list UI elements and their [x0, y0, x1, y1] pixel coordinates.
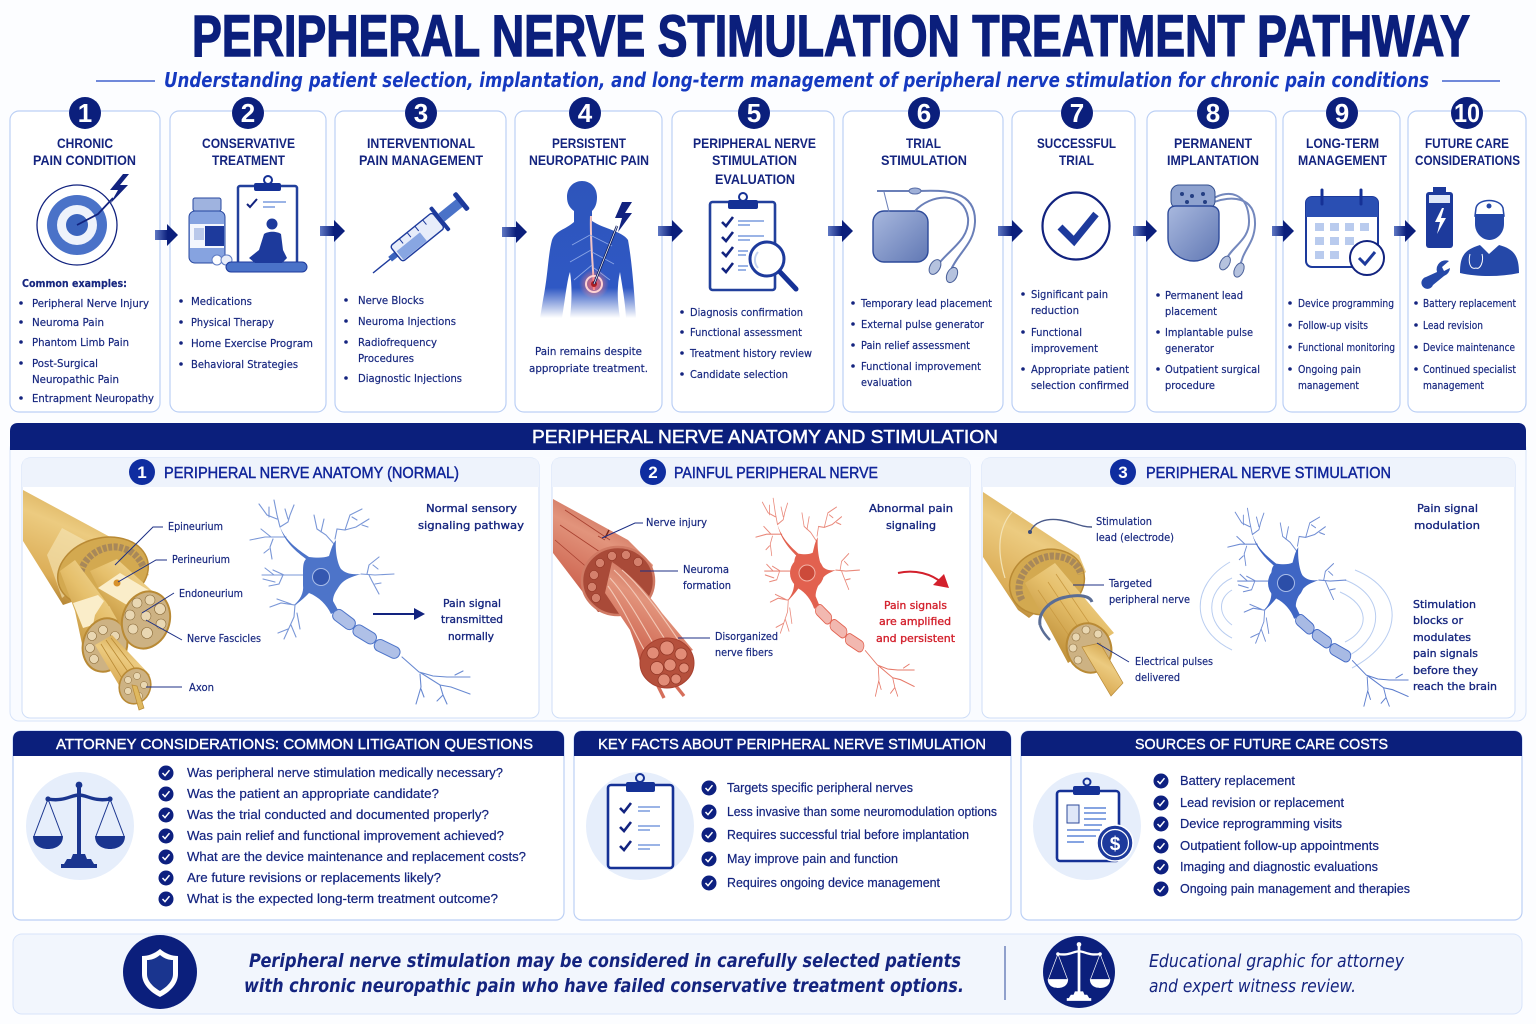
- heading: STIMULATION: [712, 152, 797, 168]
- captions: signaling: [886, 519, 936, 532]
- icon: clipboard and magnifier: [710, 193, 796, 290]
- list: Procedures: [358, 353, 414, 365]
- heading: STIMULATION: [881, 152, 967, 168]
- list: Temporary lead placement: [860, 298, 992, 310]
- panel: step 3 interventional pain management: [335, 97, 506, 412]
- list: Home Exercise Program: [191, 338, 313, 350]
- arrow 8 to 9: [1272, 220, 1294, 242]
- captions: [869, 502, 956, 645]
- list: Common examples:: [22, 278, 127, 290]
- icon: clipboard: [586, 772, 694, 880]
- list: Device maintenance: [1423, 342, 1515, 354]
- cost list: Imaging and diagnostic evaluations: [1180, 859, 1378, 874]
- heading: PERSISTENT: [552, 135, 626, 151]
- list: Medications: [191, 296, 252, 308]
- sub-panel 3: stimulation: [982, 458, 1515, 718]
- list: [179, 296, 313, 371]
- captions: signaling pathway: [418, 519, 525, 532]
- red signal arrow: [898, 572, 949, 588]
- list: Pain relief assessment: [861, 340, 970, 352]
- list: evaluation: [861, 377, 912, 389]
- heading: LONG-TERM: [1306, 135, 1379, 151]
- captions: modulates: [1413, 631, 1471, 644]
- list: Neuropathic Pain: [32, 374, 119, 386]
- nerve labels: Endoneurium: [179, 588, 243, 600]
- question list: What are the device maintenance and replacement costs?: [187, 849, 526, 864]
- list: Functional improvement: [861, 361, 981, 373]
- heading: INTERVENTIONAL: [367, 135, 475, 151]
- list: Candidate selection: [690, 369, 788, 381]
- list: procedure: [1165, 380, 1215, 392]
- heading: SUCCESSFUL: [1037, 135, 1116, 151]
- panel: step 4 persistent neuropathic pain: [515, 97, 662, 412]
- illustration: normal neuron: [250, 500, 470, 704]
- list: Functional: [1031, 327, 1082, 339]
- sub-panel heading: [640, 459, 878, 485]
- heading: PERMANENT: [1174, 135, 1252, 151]
- nerve labels: Axon: [189, 682, 214, 694]
- illustration: nerve cross-section: [23, 490, 177, 710]
- nerve labels: Nerve injury: [646, 517, 707, 529]
- list: Post-Surgical: [32, 358, 98, 370]
- list: Functional monitoring: [1298, 342, 1395, 354]
- panel heading: [1021, 731, 1522, 756]
- list: [851, 298, 992, 389]
- sub-panel 1: normal anatomy: [22, 458, 539, 718]
- arrow 4 to 5: [658, 220, 683, 242]
- nerve labels: Disorganized: [715, 631, 778, 643]
- panel heading: ATTORNEY CONSIDERATIONS: COMMON LITIGATION QUESTIONS: [56, 736, 533, 753]
- heading: TRIAL: [906, 135, 941, 151]
- sub-panel heading: [129, 459, 459, 485]
- nerve labels: Electrical pulses: [1135, 656, 1213, 668]
- nerve labels: Epineurium: [168, 521, 223, 533]
- list: [680, 307, 812, 381]
- nerve labels: Perineurium: [172, 554, 230, 566]
- captions: Pain signal: [1417, 502, 1478, 515]
- badge 1: [69, 97, 101, 129]
- nerve labels: Neuroma: [683, 564, 729, 576]
- heading: FUTURE CARE: [1425, 135, 1509, 151]
- signal arrow: [373, 608, 425, 620]
- list: Device programming: [1298, 298, 1394, 310]
- heading: PAIN CONDITION: [33, 152, 136, 168]
- badge 7: 7: [1070, 98, 1084, 128]
- list: Ongoing pain: [1298, 364, 1361, 376]
- nerve labels: [1073, 516, 1213, 684]
- badge 4: [569, 97, 601, 129]
- captions: blocks or: [1413, 614, 1463, 627]
- heading: [359, 135, 483, 168]
- list: Significant pain: [1031, 289, 1108, 301]
- nerve labels: [115, 521, 261, 694]
- facts list: Targets specific peripheral nerves: [727, 780, 913, 795]
- heading: [1298, 135, 1387, 168]
- list: Continued specialist: [1423, 364, 1516, 376]
- captions: modulation: [1414, 519, 1480, 532]
- list: [19, 278, 154, 405]
- arrow 1 to 2: [155, 224, 178, 246]
- arrow 3 to 4: [502, 221, 527, 243]
- heading: [202, 135, 295, 168]
- list: reduction: [1031, 305, 1079, 317]
- captions: reach the brain: [1413, 680, 1497, 693]
- heading: [33, 135, 136, 168]
- panel heading: [574, 731, 1011, 756]
- section heading bar: [10, 423, 1526, 450]
- badge 5: 5: [747, 98, 761, 128]
- heading: EVALUATION: [715, 171, 795, 187]
- captions: [418, 502, 525, 643]
- heading: IMPLANTATION: [1167, 152, 1259, 168]
- list: Functional assessment: [690, 327, 802, 339]
- section heading bar: PERIPHERAL NERVE ANATOMY AND STIMULATION: [532, 427, 998, 447]
- list: Neuroma Pain: [32, 317, 104, 329]
- heading: [881, 135, 967, 168]
- panel: step 8 permanent implantation: [1147, 97, 1276, 412]
- heading: CHRONIC: [57, 135, 113, 151]
- panel: step 1 chronic pain condition: [10, 97, 160, 412]
- badge 6: [908, 97, 940, 129]
- list: [1414, 298, 1516, 392]
- arrow 7 to 8: [1133, 220, 1157, 242]
- icon: back with pain point: [540, 181, 636, 318]
- panel: sources of future care costs: [1021, 731, 1522, 920]
- icon: medication and therapy: [189, 176, 307, 272]
- list: Phantom Limb Pain: [32, 337, 129, 349]
- panel: step 9 long-term management: [1283, 97, 1400, 412]
- icon: calendar with check: [1306, 190, 1384, 275]
- cost list: Ongoing pain management and therapies: [1180, 881, 1410, 896]
- question list: [158, 765, 526, 906]
- list: [1288, 298, 1395, 392]
- captions: pain signals: [1413, 647, 1478, 660]
- facts list: Less invasive than some neuromodulation options: [727, 804, 997, 819]
- list: Behavioral Strategies: [191, 359, 298, 371]
- cost list: [1154, 773, 1410, 896]
- nerve labels: nerve fibers: [715, 647, 773, 659]
- sub-panel heading: 3: [1118, 463, 1128, 482]
- badge 5: [738, 97, 770, 129]
- nerve labels: formation: [683, 580, 731, 592]
- cost list: Battery replacement: [1180, 773, 1295, 788]
- icon: implantable pulse generator: [1168, 185, 1255, 279]
- badge 7: [1061, 97, 1093, 129]
- panel heading: [13, 731, 564, 756]
- badge 2: 2: [241, 98, 255, 128]
- arrow 6 to 7: [998, 220, 1023, 242]
- captions: are amplified: [879, 615, 951, 628]
- panel: step 5 evaluation: [672, 97, 834, 412]
- heading: [1415, 135, 1520, 168]
- heading: PERIPHERAL NERVE: [693, 135, 816, 151]
- sub-panel heading: [1110, 459, 1391, 485]
- list: Entrapment Neuropathy: [32, 393, 154, 405]
- panel heading: KEY FACTS ABOUT PERIPHERAL NERVE STIMULATION: [598, 736, 986, 753]
- badge 2: [232, 97, 264, 129]
- icon: cost document: [1033, 772, 1141, 880]
- nerve labels: lead (electrode): [1096, 532, 1174, 544]
- panel heading: SOURCES OF FUTURE CARE COSTS: [1135, 736, 1388, 753]
- badge 1: 1: [78, 98, 92, 128]
- list: Follow-up visits: [1298, 320, 1368, 332]
- facts list: May improve pain and function: [727, 851, 898, 866]
- facts list: Requires ongoing device management: [727, 875, 940, 890]
- heading: NEUROPATHIC PAIN: [529, 152, 649, 168]
- heading: PAIN MANAGEMENT: [359, 152, 483, 168]
- question list: What is the expected long-term treatment outcome?: [187, 891, 498, 906]
- badge 9: [1326, 97, 1358, 129]
- captions: and persistent: [876, 632, 956, 645]
- question list: Was peripheral nerve stimulation medically necessary?: [187, 765, 503, 780]
- sub-panel heading: 1: [137, 463, 147, 482]
- arrow 9 to 10: [1394, 220, 1416, 242]
- facts list: Requires successful trial before implantation: [727, 827, 969, 842]
- icon: scales of justice: [26, 772, 134, 880]
- nerve labels: peripheral nerve: [1109, 594, 1190, 606]
- facts list: [702, 780, 997, 890]
- list: management: [1423, 380, 1484, 392]
- heading: CONSERVATIVE: [202, 135, 295, 151]
- heading: MANAGEMENT: [1298, 152, 1387, 168]
- sub-panel heading: PERIPHERAL NERVE STIMULATION: [1146, 465, 1391, 482]
- captions: [1413, 502, 1497, 693]
- sub-panel 2: painful nerve: [552, 458, 970, 718]
- nerve labels: [602, 517, 778, 659]
- panel: step 6 trial stimulation: [843, 97, 1003, 412]
- captions: Pain signal: [443, 597, 501, 610]
- list: Treatment history review: [689, 348, 812, 360]
- list: Peripheral Nerve Injury: [32, 298, 149, 310]
- badge 8: [1197, 97, 1229, 129]
- list: Appropriate patient: [1031, 364, 1129, 376]
- icon: cost document: $: [1110, 834, 1121, 855]
- panel: footer banner: [13, 934, 1522, 1014]
- list: Lead revision: [1423, 320, 1483, 332]
- list: generator: [1165, 343, 1215, 355]
- panel: step 2 conservative treatment: [170, 97, 326, 412]
- cost list: Outpatient follow-up appointments: [1180, 838, 1379, 853]
- nerve labels: delivered: [1135, 672, 1180, 684]
- badge 3: [405, 97, 437, 129]
- question list: Was the trial conducted and documented properly?: [187, 807, 489, 822]
- conclusion statement: with chronic neuropathic pain who have failed conservative treatment options.: [244, 975, 964, 997]
- icon: syringe: [364, 188, 473, 285]
- icon: white scales: [1043, 936, 1115, 1008]
- nerve labels: Stimulation: [1096, 516, 1152, 528]
- panel: key facts: [574, 731, 1011, 920]
- heading: [1167, 135, 1259, 168]
- panel: attorney considerations: [13, 731, 564, 920]
- list: management: [1298, 380, 1359, 392]
- list: Neuroma Injections: [358, 316, 456, 328]
- caption: appropriate treatment.: [529, 363, 648, 375]
- list: External pulse generator: [861, 319, 985, 331]
- heading: TREATMENT: [212, 152, 285, 168]
- nerve labels: Targeted: [1108, 578, 1152, 590]
- list: Battery replacement: [1423, 298, 1516, 310]
- captions: Pain signals: [884, 599, 947, 612]
- cost list: Lead revision or replacement: [1180, 795, 1344, 810]
- captions: Abnormal pain: [869, 502, 953, 515]
- captions: transmitted: [441, 613, 503, 626]
- illustration: modulated neuron: [1228, 508, 1408, 706]
- panel: anatomy section: [10, 423, 1526, 721]
- list: [344, 295, 462, 385]
- sub-panel heading: 2: [648, 463, 658, 482]
- badge 10: 10: [1454, 98, 1480, 128]
- icon: battery, wrench and clinician: [1421, 187, 1519, 289]
- list: Implantable pulse: [1165, 327, 1253, 339]
- list: Physical Therapy: [191, 317, 274, 329]
- educational note: and expert witness review.: [1149, 976, 1356, 997]
- educational note: [1149, 951, 1404, 997]
- badge 3: 3: [414, 98, 428, 128]
- list: Radiofrequency: [358, 337, 437, 349]
- icon: check in circle: [1042, 192, 1110, 260]
- panel: step 7 successful trial: [1012, 97, 1135, 412]
- badge 9: 9: [1335, 98, 1349, 128]
- badge 8: 8: [1206, 98, 1220, 128]
- caption: [529, 346, 648, 375]
- badge 6: 6: [917, 98, 931, 128]
- icon: target: [37, 174, 129, 265]
- captions: normally: [448, 630, 494, 643]
- panel: step 10 future care: [1408, 97, 1526, 412]
- heading: [529, 135, 649, 168]
- question list: Was the patient an appropriate candidate?: [187, 786, 439, 801]
- stimulation waves: [1200, 562, 1392, 668]
- list: Outpatient surgical: [1165, 364, 1260, 376]
- conclusion statement: Peripheral nerve stimulation may be considered in carefully selected patients: [249, 950, 961, 972]
- heading: [1037, 135, 1116, 168]
- illustration: damaged nerve: [553, 499, 694, 698]
- list: improvement: [1031, 343, 1098, 355]
- question list: Was pain relief and functional improvement achieved?: [187, 828, 504, 843]
- nerve labels: Nerve Fascicles: [187, 633, 261, 645]
- list: Diagnosis confirmation: [690, 307, 803, 319]
- list: [1021, 289, 1129, 392]
- illustration: sensitised neuron: [756, 498, 914, 696]
- sub-panel heading: PAINFUL PERIPHERAL NERVE: [674, 465, 878, 482]
- list: Nerve Blocks: [358, 295, 424, 307]
- educational note: Educational graphic for attorney: [1149, 951, 1404, 972]
- captions: Normal sensory: [426, 502, 518, 515]
- question list: Are future revisions or replacements likely?: [187, 870, 441, 885]
- arrow 5 to 6: [828, 220, 853, 242]
- icon: external stimulator: [873, 188, 975, 284]
- conclusion statement: [244, 950, 964, 997]
- icon: shield: [123, 935, 197, 1009]
- list: Permanent lead: [1165, 290, 1243, 302]
- arrow 2 to 3: [320, 220, 345, 242]
- list: selection confirmed: [1031, 380, 1129, 392]
- cost list: Device reprogramming visits: [1180, 816, 1342, 831]
- captions: before they: [1413, 664, 1478, 677]
- illustration: nerve with electrode: [983, 492, 1123, 696]
- heading: [693, 135, 816, 187]
- sub-panel heading: PERIPHERAL NERVE ANATOMY (NORMAL): [164, 465, 459, 482]
- list: [1156, 290, 1260, 392]
- caption: Pain remains despite: [535, 346, 642, 358]
- badge 4: 4: [578, 98, 593, 128]
- heading: TRIAL: [1059, 152, 1094, 168]
- list: Diagnostic Injections: [358, 373, 462, 385]
- captions: Stimulation: [1413, 598, 1476, 611]
- list: placement: [1165, 306, 1217, 318]
